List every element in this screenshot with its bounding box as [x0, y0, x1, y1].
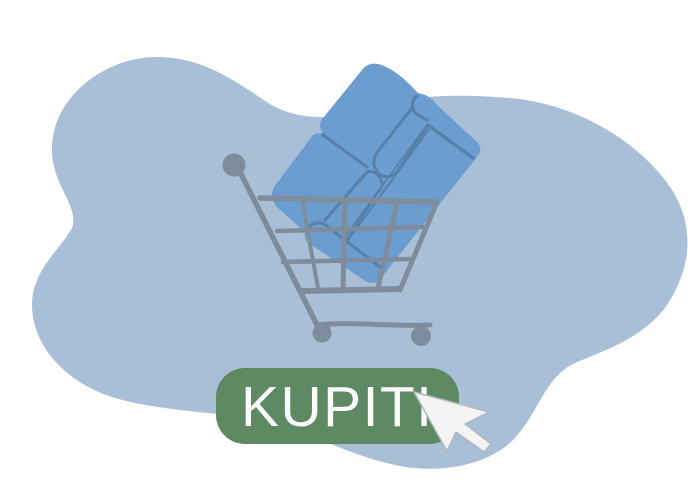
- button label: KUPITI: [241, 375, 432, 439]
- button: KUPITI: [216, 368, 459, 444]
- icon: sofa: [272, 64, 480, 283]
- background blob: [32, 57, 688, 469]
- icon: mouse cursor: [414, 392, 491, 452]
- sofa seams: [310, 96, 473, 267]
- icon: shopping cart: [222, 154, 437, 346]
